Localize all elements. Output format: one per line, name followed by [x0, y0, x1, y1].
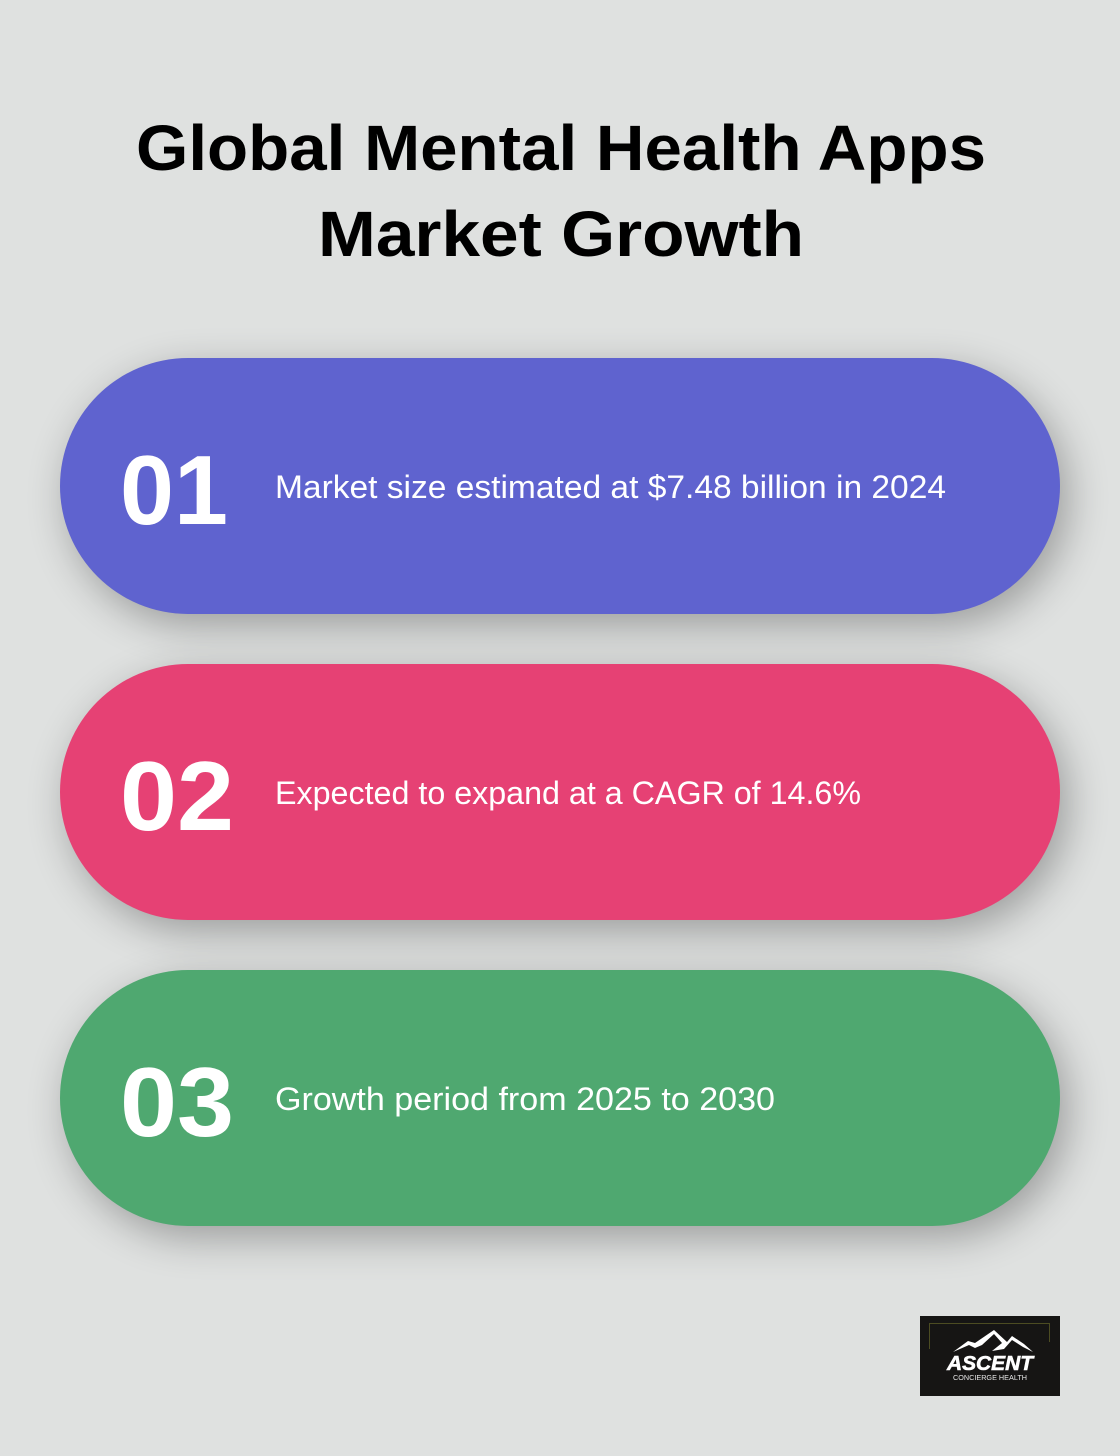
- tagline: CONCIERGE HEALTH: [953, 1375, 1027, 1382]
- logo: Ascent Concierge Health: [920, 1316, 1060, 1396]
- text: growth period: Growth period from 2025 to 2030: [275, 1081, 775, 1117]
- number 02: 02: [120, 741, 234, 851]
- icon: mountains: [953, 1330, 1033, 1352]
- title: Global Mental Health Apps: [136, 112, 986, 184]
- text: market size: Market size estimated at $7.48 billion in 2024: [275, 469, 946, 505]
- number 03: 03: [120, 1047, 234, 1157]
- panel: growth period: [60, 970, 1060, 1226]
- text: CAGR: Expected to expand at a CAGR of 14.6%: [275, 775, 861, 811]
- title: Market Growth: [318, 198, 804, 270]
- panel: CAGR: [60, 664, 1060, 920]
- panel: market size: [60, 358, 1060, 614]
- title: [136, 112, 986, 270]
- wordmark: ASCENT: [946, 1353, 1035, 1375]
- number 01: 01: [120, 435, 228, 545]
